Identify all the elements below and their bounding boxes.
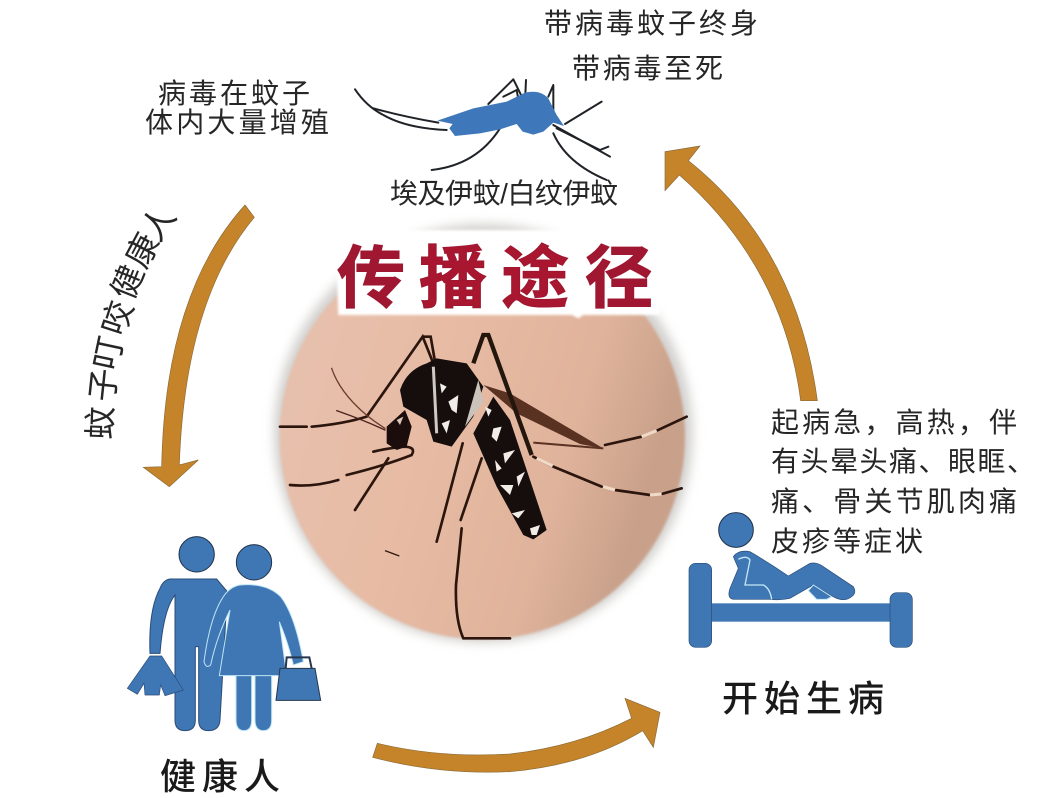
text: carry virus for life [544, 8, 758, 84]
icon: healthy couple [127, 537, 321, 731]
head [387, 410, 412, 450]
blue body [437, 92, 564, 136]
text: mosquito species: 埃及伊蚊/白纹伊蚊 [390, 178, 618, 209]
man [150, 579, 227, 731]
mosquito illustration [355, 79, 610, 180]
thorax [400, 358, 483, 447]
text: carry virus for life: 带病毒蚊子终身 [544, 8, 758, 39]
text: symptoms [771, 407, 1035, 557]
label: becoming ill: 开始生病 [722, 678, 884, 719]
text: mosquito bites healthy person: 健 [104, 260, 151, 304]
title: 播 [419, 241, 487, 317]
text: symptoms: 皮疹等症状 [771, 526, 923, 557]
text: virus multiplies in mosquito [145, 78, 329, 138]
text: carry virus for life: 带病毒至死 [572, 53, 723, 84]
woman [204, 585, 303, 731]
text: symptoms: 痛、骨关节肌肉痛 [771, 486, 1017, 517]
abdomen [473, 397, 547, 539]
man's bag [127, 656, 183, 696]
title: 传 [337, 241, 405, 317]
photo: mosquito biting skin [274, 224, 693, 643]
title [337, 241, 653, 317]
text: mosquito bites healthy person: 子 [83, 367, 124, 403]
arrow: illness to mosquito [665, 146, 817, 401]
text: mosquito bites healthy person: 叮 [87, 333, 130, 373]
leg bands [537, 431, 662, 495]
label: healthy person: 健康人 [160, 756, 280, 797]
text: mosquito bites healthy person: 咬 [95, 297, 140, 340]
text: symptoms: 起病急，高热，伴 [771, 407, 1017, 438]
text: virus multiplies in mosquito: 病毒在蚊子 [158, 78, 310, 109]
mosquito on skin [280, 335, 687, 638]
icon: sick person in bed [689, 513, 912, 647]
text: mosquito bites healthy person: 康 [118, 227, 167, 273]
woman's bag [286, 657, 312, 668]
text: mosquito bites healthy person [81, 199, 183, 440]
text: mosquito bites healthy person: 人 [134, 199, 183, 247]
text: symptoms: 有头晕头痛、眼眶、 [771, 446, 1035, 477]
arrow: healthy person to illness [373, 698, 660, 772]
arrow: bite to healthy person [143, 205, 254, 487]
text: mosquito bites healthy person: 蚊 [81, 406, 120, 440]
hind leg [473, 335, 532, 455]
text: virus multiplies in mosquito: 体内大量增殖 [145, 107, 329, 138]
reclining body [729, 551, 855, 600]
title: 途 [501, 241, 569, 317]
wing [483, 385, 603, 448]
title: 径 [585, 241, 653, 317]
